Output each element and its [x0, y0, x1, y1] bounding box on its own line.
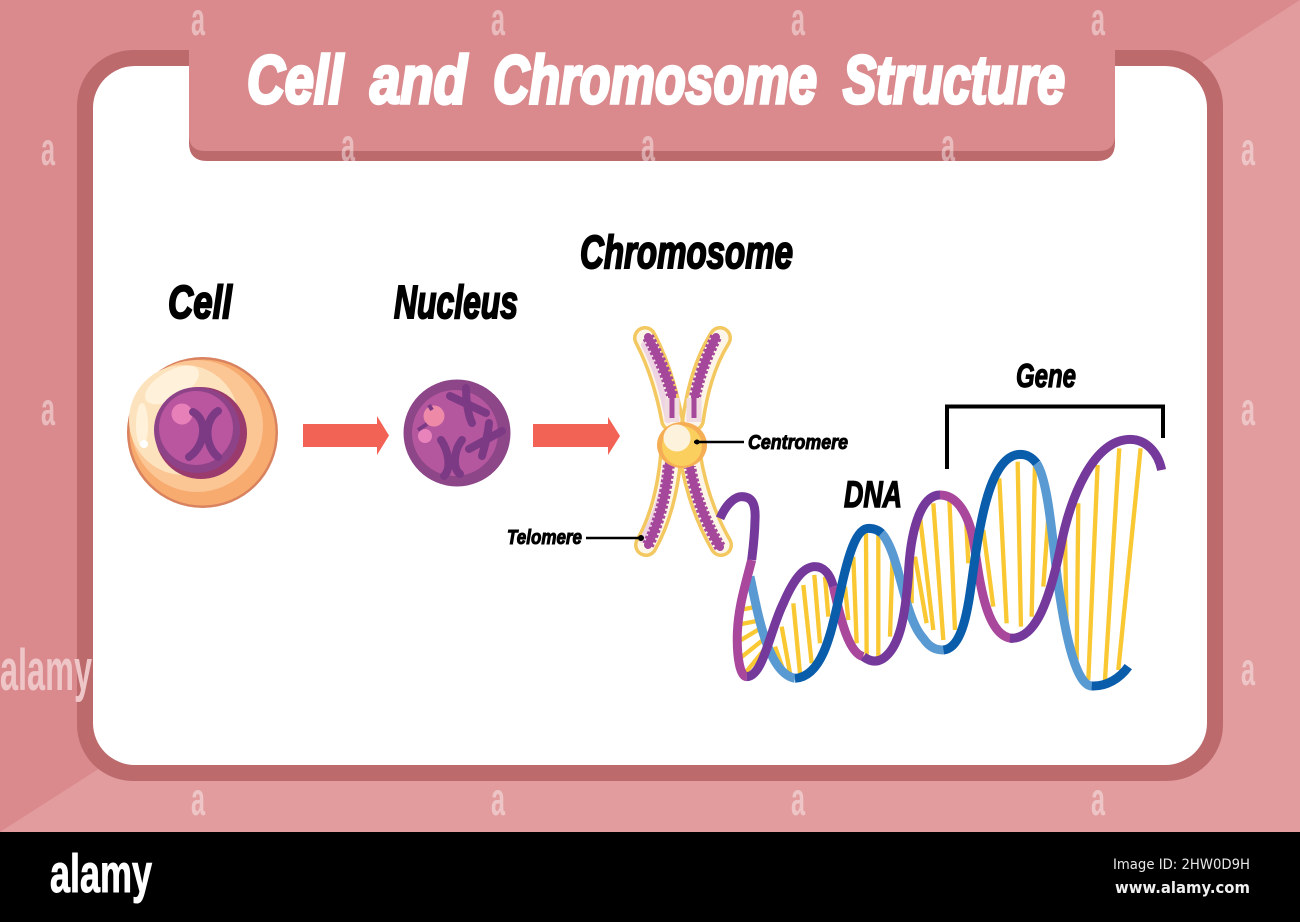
label: centromere: Centromere — [748, 432, 848, 454]
heading: Nucleus: Nucleus — [394, 276, 518, 328]
title — [247, 42, 1065, 118]
leader: telomere — [586, 535, 644, 541]
watermark tiles: a — [341, 119, 355, 171]
title banner — [189, 0, 1115, 161]
dark blue strand — [795, 454, 1128, 686]
url: www.alamy.com — [1115, 878, 1250, 897]
purple strand — [720, 439, 1162, 677]
panel: white board — [77, 50, 1223, 781]
centromere — [657, 422, 707, 468]
title: Structure — [843, 42, 1065, 118]
footer bar — [0, 832, 1300, 922]
logo: alamy: alamy — [50, 844, 152, 904]
label: telomere: Telomere — [507, 527, 582, 549]
magenta strand — [737, 495, 1013, 677]
watermark tiles: a — [1241, 123, 1255, 175]
watermark tiles: a — [641, 119, 655, 171]
icon: chromosome — [642, 337, 721, 547]
watermark tiles: a — [41, 123, 55, 175]
light blue strand — [750, 463, 1092, 686]
heading: Cell: Cell — [168, 276, 233, 328]
leader: centromere — [694, 440, 744, 444]
heading: Gene: Gene — [1016, 357, 1076, 394]
watermark tiles: a — [791, 773, 805, 825]
arrow: cell to nucleus — [303, 416, 389, 455]
watermark tiles: a — [1091, 773, 1105, 825]
chromosomes in nucleus — [441, 388, 502, 476]
heading: DNA: DNA — [844, 474, 902, 515]
watermark tiles: a — [191, 773, 205, 825]
rungs — [737, 448, 1141, 680]
watermark tiles: a — [1241, 643, 1255, 695]
image id: Image ID: 2HW0D9H — [1113, 857, 1250, 873]
title: Cell — [247, 42, 345, 118]
watermark tiles: a — [491, 773, 505, 825]
title: and — [370, 42, 468, 118]
watermark tiles: a — [941, 119, 955, 171]
heading: Chromosome: Chromosome — [580, 226, 793, 278]
icon: nucleus — [404, 380, 510, 486]
icon: cell — [127, 357, 278, 508]
gene bracket — [947, 406, 1163, 469]
dna helix — [720, 439, 1162, 686]
cell nucleus — [155, 387, 247, 479]
watermark tiles: a — [41, 383, 55, 435]
watermark tiles: a — [1241, 383, 1255, 435]
title: Chromosome — [493, 42, 817, 118]
arrow: nucleus to chromosome — [533, 417, 620, 455]
watermark: alamy left: alamy — [0, 638, 92, 703]
